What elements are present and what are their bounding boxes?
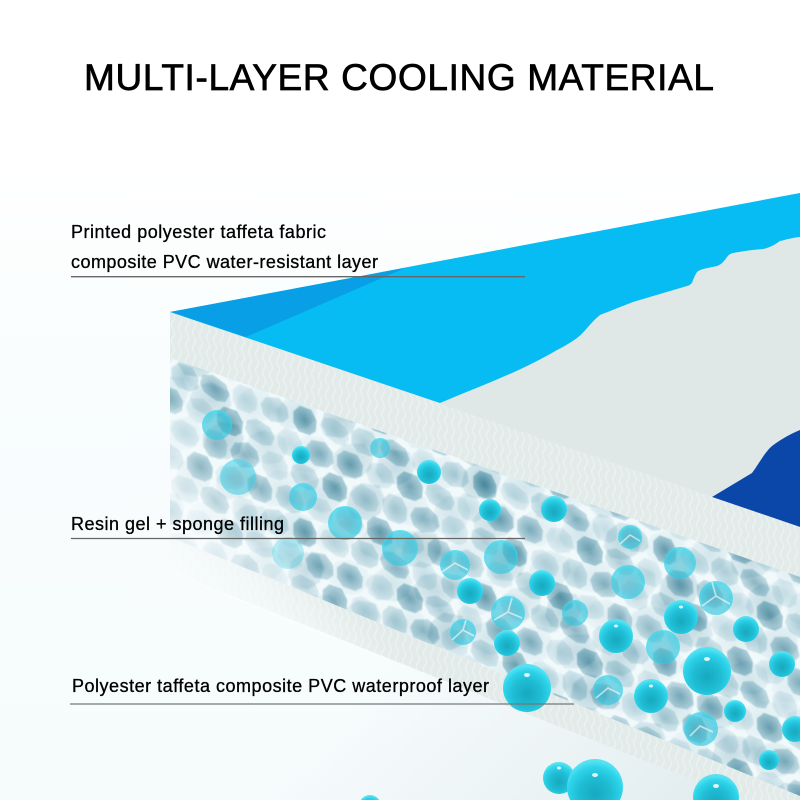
layer: upper white band [170, 312, 800, 577]
label: top layer: composite PVC water-resistant layer [71, 252, 378, 272]
layer: top fabric surface [170, 193, 800, 527]
panel: material cross-section [170, 193, 800, 800]
label: bottom layer: Polyester taffeta composite PVC waterproof layer [72, 676, 489, 696]
foam fade at lower left [170, 360, 440, 685]
title: MULTI-LAYER COOLING MATERIAL [84, 57, 714, 98]
layer: lower white band [170, 537, 800, 800]
bubbles: resin gel [202, 410, 800, 800]
layer: foam filling [170, 358, 800, 796]
blue print area [170, 193, 800, 403]
dark blue print area [712, 430, 800, 527]
floor glow [0, 500, 800, 800]
label: top layer [71, 222, 525, 277]
darker blue wedge [170, 268, 405, 337]
label: filling: Resin gel + sponge filling [71, 514, 284, 534]
foam strands over bubbles [442, 535, 730, 736]
label: top layer: Printed polyester taffeta fabric [71, 222, 326, 242]
